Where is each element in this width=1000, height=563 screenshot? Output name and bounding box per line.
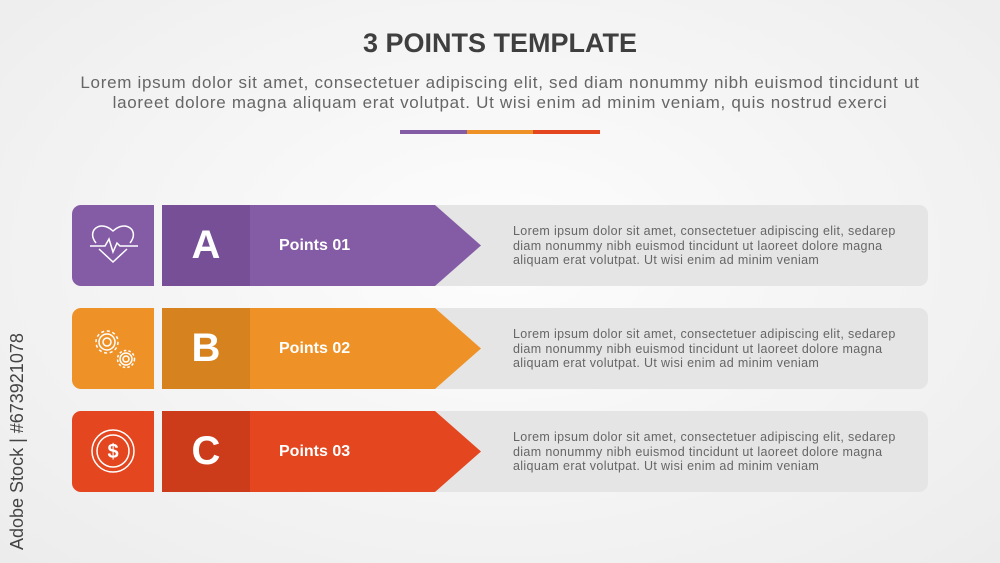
- letter A: A: [192, 223, 220, 267]
- arrow bar: [162, 308, 481, 389]
- icon box: heart: [72, 205, 154, 286]
- row C: [72, 411, 928, 492]
- description: [513, 430, 896, 473]
- icon box: coin: [72, 411, 154, 492]
- icon box: gears: [72, 308, 154, 389]
- tricolor underline: [400, 130, 600, 134]
- subtitle: [80, 73, 920, 112]
- letter B: B: [192, 326, 220, 370]
- description: diam nonummy nibh euismod tincidunt ut laoreet dolore magna: [513, 444, 882, 458]
- arrow bar: [162, 205, 481, 286]
- subtitle: laoreet dolore magna aliquam erat volutpat. Ut wisi enim ad minim veniam, quis nostrud exerci: [113, 93, 887, 112]
- label: Points 02: [279, 340, 350, 357]
- description: aliquam erat volutpat. Ut wisi enim ad minim veniam: [513, 459, 819, 473]
- arrow bar: [162, 411, 481, 492]
- description: Lorem ipsum dolor sit amet, consectetuer adipiscing elit, sedarep: [513, 327, 896, 341]
- title: 3 POINTS TEMPLATE: [363, 28, 637, 58]
- description: Lorem ipsum dolor sit amet, consectetuer adipiscing elit, sedarep: [513, 224, 896, 238]
- watermark: vertical Adobe Stock text: Adobe Stock | #673921078: [7, 333, 27, 550]
- description: aliquam erat volutpat. Ut wisi enim ad minim veniam: [513, 253, 819, 267]
- description: diam nonummy nibh euismod tincidunt ut laoreet dolore magna: [513, 238, 882, 252]
- label: Points 01: [279, 237, 350, 254]
- description: [513, 224, 896, 267]
- label: Points 03: [279, 443, 350, 460]
- row A: [72, 205, 928, 286]
- description: [513, 327, 896, 370]
- icon box: coin: $: [107, 441, 119, 463]
- description: aliquam erat volutpat. Ut wisi enim ad minim veniam: [513, 356, 819, 370]
- description: diam nonummy nibh euismod tincidunt ut laoreet dolore magna: [513, 342, 882, 356]
- row B: [72, 308, 928, 389]
- subtitle: Lorem ipsum dolor sit amet, consectetuer adipiscing elit, sed diam nonummy nibh euismod tincidunt ut: [80, 73, 920, 92]
- letter C: C: [192, 429, 220, 473]
- description: Lorem ipsum dolor sit amet, consectetuer adipiscing elit, sedarep: [513, 430, 896, 444]
